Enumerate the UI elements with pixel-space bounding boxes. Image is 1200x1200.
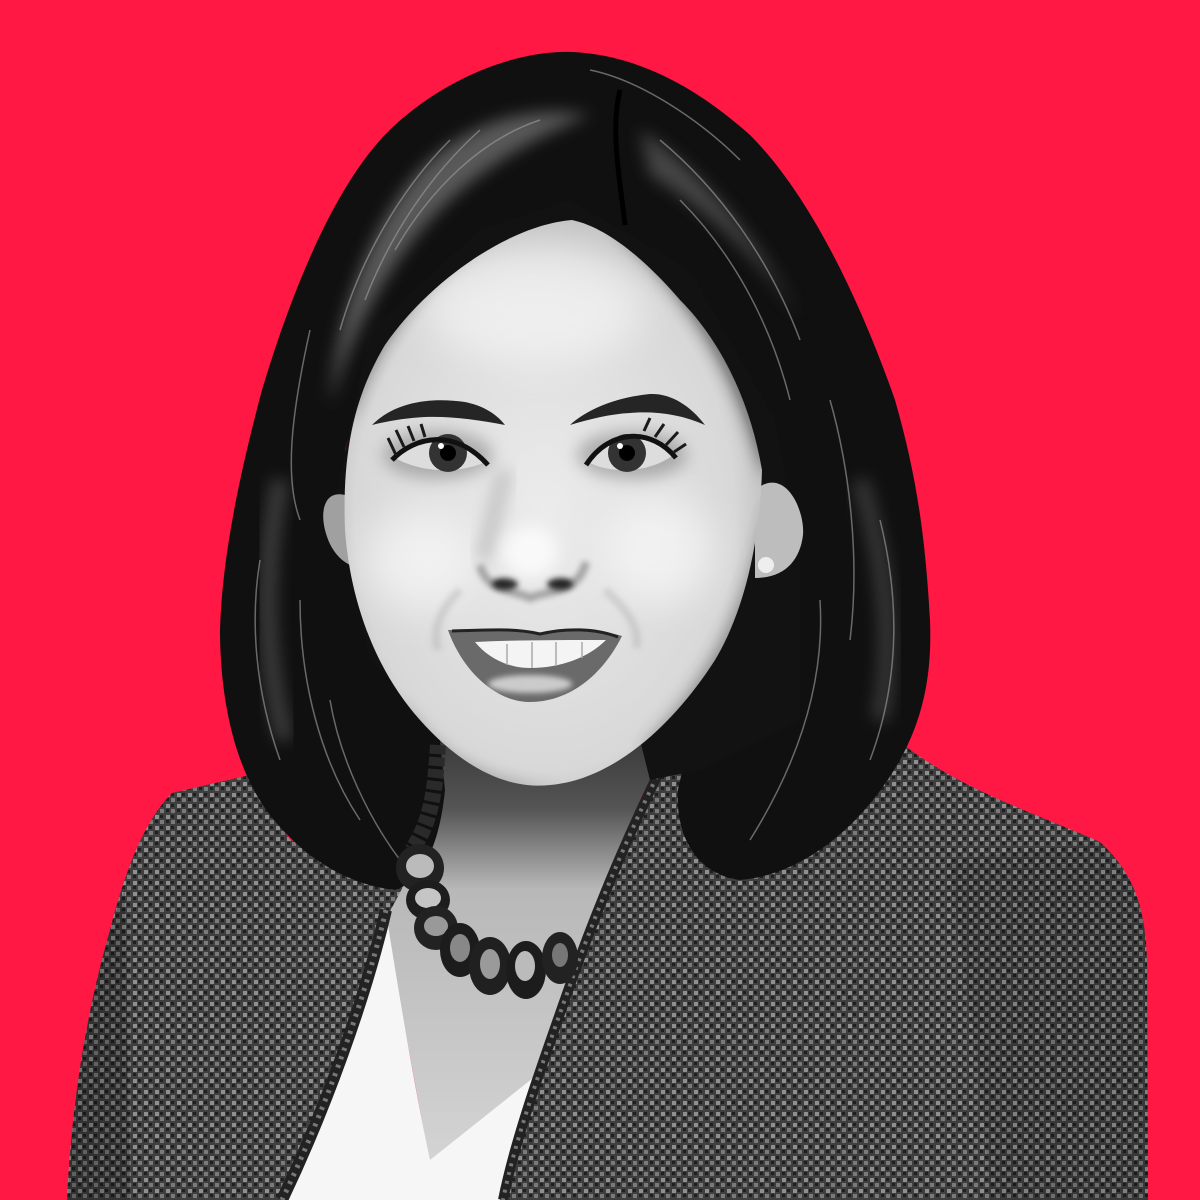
- hair highlights: [255, 70, 894, 860]
- hair: [220, 52, 930, 890]
- jacket: left side: [67, 775, 412, 1200]
- neck and chest: [385, 720, 680, 1165]
- mouth: [448, 630, 622, 702]
- eye: right: [577, 418, 687, 479]
- necklace: [396, 745, 578, 999]
- nose: [480, 470, 586, 598]
- earring: [758, 557, 774, 573]
- eyebrows: [372, 394, 705, 425]
- hair backing behind the face: [335, 200, 800, 780]
- jacket: right side: [503, 738, 1148, 1200]
- ear: right: [755, 483, 803, 578]
- ear: left: [323, 494, 350, 565]
- blouse: [280, 925, 533, 1200]
- eye: left: [383, 424, 493, 479]
- face: [344, 220, 762, 786]
